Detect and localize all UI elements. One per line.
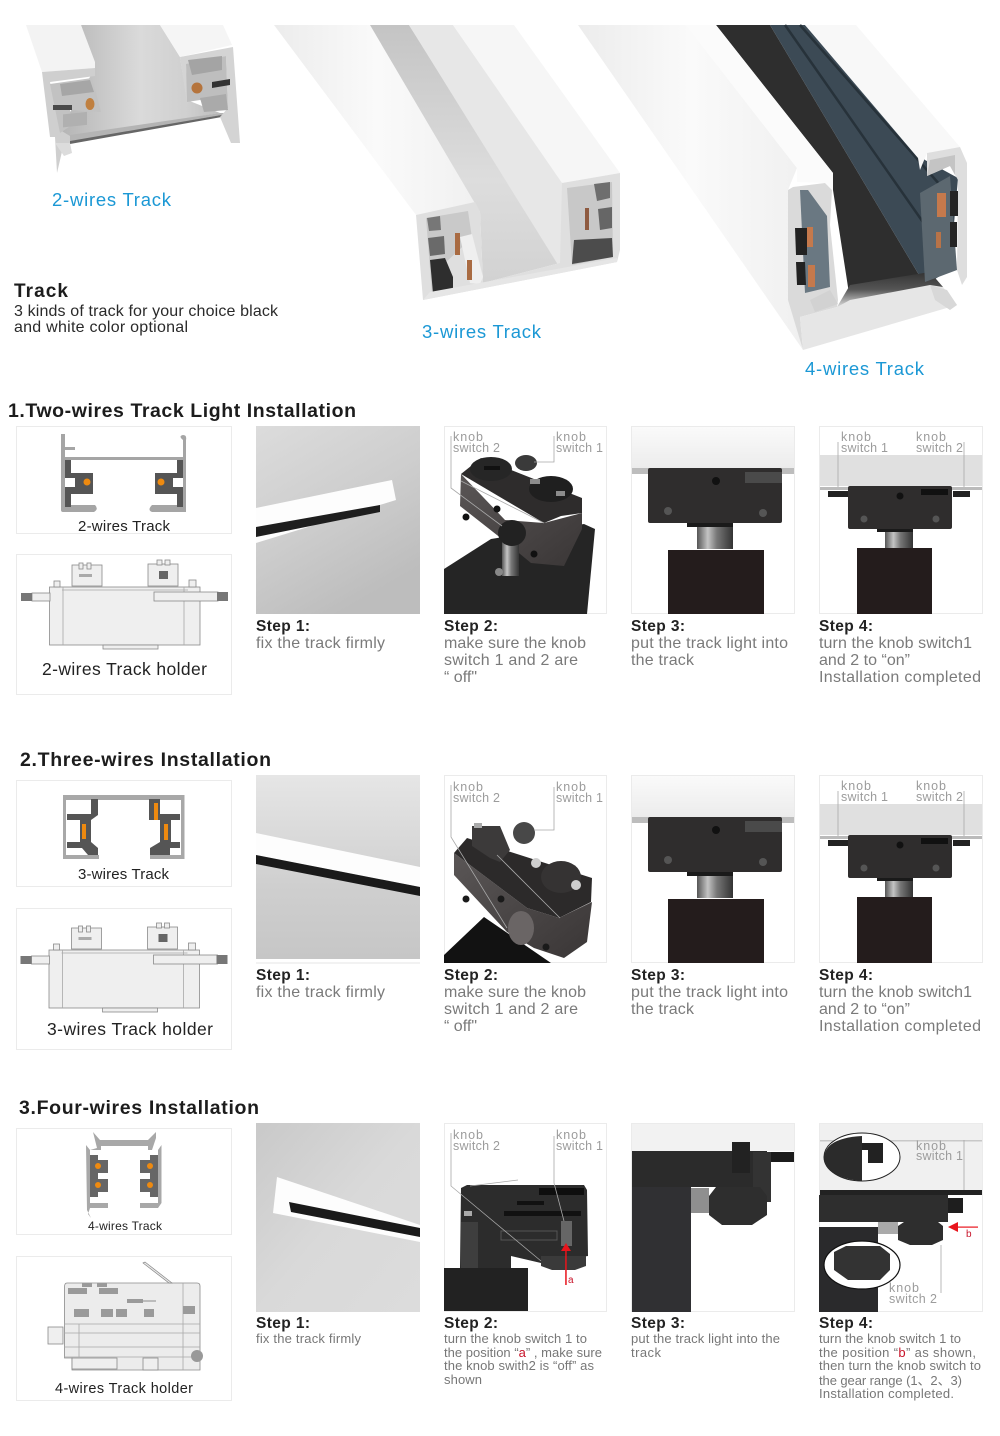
panel: 4-wires track holder <box>16 1256 232 1400</box>
step 2 caption <box>444 618 586 686</box>
step 4 caption: the position “b” as shown, <box>819 1345 976 1360</box>
step 2 caption: switch 1 and 2 are <box>444 652 578 669</box>
step 2 photo: two-wires: knob <box>453 430 483 444</box>
step 2 caption: Step 2: <box>444 967 498 984</box>
panel: 4-wires track profile: 4-wires Track <box>88 1219 163 1233</box>
step 3 caption <box>631 1315 780 1360</box>
photo: 2-wires track <box>26 25 240 173</box>
step 2 photo: three-wires: knob <box>556 780 586 794</box>
step 4 caption: Installation completed. <box>819 1386 954 1401</box>
step 1 caption <box>256 967 385 1001</box>
step 4 caption: turn the knob switch1 <box>819 635 972 652</box>
step 3 caption: Step 3: <box>631 1315 685 1332</box>
step 4 photo: two-wires <box>820 426 982 614</box>
step 4 caption: turn the knob switch1 <box>819 984 972 1001</box>
step 1 caption: fix the track firmly <box>256 635 385 652</box>
step 2 photo: two-wires: switch 2 <box>453 441 500 455</box>
label: 3-wires track: 3-wires Track <box>422 321 542 342</box>
step 2 photo: four-wires: knob <box>556 1128 586 1142</box>
step 3 caption: put the track light into the <box>631 1331 780 1346</box>
step 4 photo: four-wires: b <box>966 1229 972 1240</box>
step 4 caption: Installation completed <box>819 669 981 686</box>
panel: 2-wires track holder <box>16 554 232 694</box>
heading: three-wires section: 2.Three-wires Installation <box>20 749 271 771</box>
step 1 caption: fix the track firmly <box>256 1331 362 1346</box>
text block: track intro: and white color optional <box>14 319 188 336</box>
step 3 caption: Step 3: <box>631 618 685 635</box>
step 2 photo: four-wires <box>444 1124 606 1312</box>
step 4 caption <box>819 967 981 1035</box>
step 2 photo: three-wires <box>444 776 606 963</box>
step 1 caption <box>256 618 385 652</box>
step 4 photo: four-wires: knob <box>916 1139 946 1153</box>
step 2 caption: turn the knob switch 1 to <box>444 1331 587 1346</box>
step 4 photo: four-wires: knob <box>889 1281 919 1295</box>
panel: 2-wires track holder: 2-wires Track holder <box>42 659 207 679</box>
step 1 photo: two-wires <box>256 426 420 614</box>
step 2 caption: make sure the knob <box>444 984 586 1001</box>
step 2 photo: four-wires: switch 2 <box>453 1139 500 1153</box>
step 1 caption: Step 1: <box>256 618 310 635</box>
step 2 caption: switch 1 and 2 are <box>444 1001 578 1018</box>
step 4 caption: Step 4: <box>819 1315 873 1332</box>
heading: four-wires section: 3.Four-wires Installation <box>19 1097 259 1119</box>
step 2 caption: the knob swith2 is “off” as <box>444 1358 594 1373</box>
step 4 caption: Step 4: <box>819 618 873 635</box>
step 4 photo: four-wires: switch 2 <box>889 1292 937 1306</box>
step 4 caption: the gear range (1、2、3) <box>819 1373 962 1388</box>
photo: 4-wires track <box>578 25 967 350</box>
step 2 caption: “ off" <box>444 1018 477 1035</box>
step 1 caption <box>256 1315 362 1346</box>
step 2 photo: two-wires: switch 1 <box>556 441 603 455</box>
panel: 3-wires track profile: 3-wires Track <box>78 866 170 883</box>
step 3 photo: four-wires <box>632 1124 794 1312</box>
step 2 caption: Step 2: <box>444 1315 498 1332</box>
step 3 caption: put the track light into <box>631 635 788 652</box>
step 4 caption: and 2 to “on” <box>819 1001 910 1018</box>
panel: 4-wires track profile <box>16 1128 232 1234</box>
step 4 caption: then turn the knob switch to <box>819 1358 981 1373</box>
step 2 photo: two-wires: knob <box>556 430 586 444</box>
step 3 caption: the track <box>631 1001 695 1018</box>
step 2 caption <box>444 1315 602 1387</box>
step 2 caption: shown <box>444 1372 482 1387</box>
step 4 caption <box>819 618 981 686</box>
step 1 photo: four-wires <box>256 1123 420 1312</box>
step 4 photo: four-wires <box>819 1124 982 1312</box>
step 2 caption: make sure the knob <box>444 635 586 652</box>
photo: 3-wires track <box>274 25 620 300</box>
step 1 caption: fix the track firmly <box>256 984 385 1001</box>
text block: track intro: Track <box>14 281 68 302</box>
panel: 4-wires track holder: 4-wires Track holder <box>55 1381 193 1397</box>
step 2 caption <box>444 967 586 1035</box>
step 2 caption: the position “a” , make sure <box>444 1345 602 1360</box>
step 3 photo: two-wires <box>632 426 794 614</box>
step 2 caption: Step 2: <box>444 618 498 635</box>
panel: 2-wires track profile <box>16 426 232 535</box>
step 3 caption: Step 3: <box>631 967 685 984</box>
step 2 photo: three-wires: switch 2 <box>453 791 500 805</box>
step 3 caption <box>631 967 788 1018</box>
label: 2-wires track: 2-wires Track <box>52 189 172 210</box>
step 1 photo: three-wires <box>256 775 420 963</box>
step 4 caption: Installation completed <box>819 1018 981 1035</box>
label: 4-wires track: 4-wires Track <box>805 358 925 379</box>
step 4 photo: four-wires: switch 1 <box>916 1149 963 1163</box>
step 1 caption: Step 1: <box>256 1315 310 1332</box>
step 3 caption: the track <box>631 652 695 669</box>
step 1 caption: Step 1: <box>256 967 310 984</box>
step 3 caption <box>631 618 788 669</box>
panel: 3-wires track holder <box>16 908 232 1050</box>
panel: 2-wires track profile: 2-wires Track <box>78 518 170 535</box>
step 3 caption: track <box>631 1345 662 1360</box>
step 2 photo: three-wires: knob <box>453 780 483 794</box>
step 2 photo: two-wires <box>444 426 606 614</box>
panel: 3-wires track profile <box>16 780 232 886</box>
step 2 photo: four-wires: a <box>568 1275 574 1286</box>
step 4 photo: three-wires <box>820 776 982 963</box>
step 3 photo: three-wires <box>632 776 794 963</box>
step 2 caption: “ off" <box>444 669 477 686</box>
step 2 photo: four-wires: knob <box>453 1128 483 1142</box>
step 2 photo: three-wires: switch 1 <box>556 791 603 805</box>
step 4 caption: turn the knob switch 1 to <box>819 1331 961 1346</box>
step 4 caption: and 2 to “on” <box>819 652 910 669</box>
panel: 3-wires track holder: 3-wires Track holder <box>47 1019 213 1039</box>
step 2 photo: four-wires: switch 1 <box>556 1139 603 1153</box>
text block: track intro: 3 kinds of track for your choice black <box>14 303 279 320</box>
step 4 caption: Step 4: <box>819 967 873 984</box>
step 4 caption <box>819 1315 981 1401</box>
heading: two-wires section: 1.Two-wires Track Light Installation <box>8 400 356 422</box>
step 3 caption: put the track light into <box>631 984 788 1001</box>
text block: track intro <box>14 281 279 336</box>
